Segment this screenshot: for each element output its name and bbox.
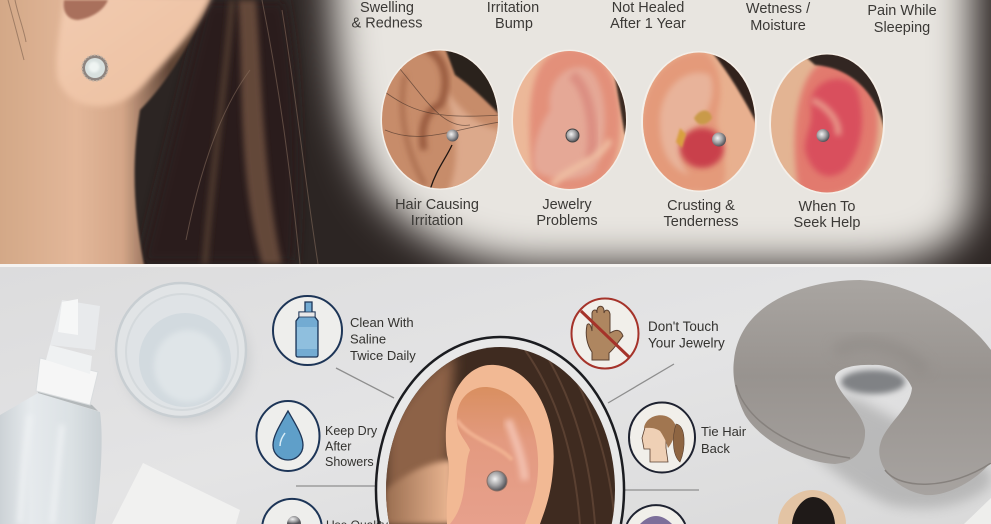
label: clean with saline: Clean With — [350, 315, 414, 330]
icon: quality jewelry — [262, 499, 322, 524]
label: wetness or moisture: Wetness / — [746, 1, 810, 17]
label: crusting and tenderness: Tenderness — [664, 214, 738, 230]
label: keep dry after showers: Showers — [325, 455, 374, 469]
label: swelling and redness: & Redness — [352, 16, 422, 32]
label: jewelry problems: Problems — [536, 213, 598, 229]
photo: hair causing irritation — [380, 48, 500, 192]
icon: saline bottle — [273, 296, 342, 365]
photo: spray bottle — [0, 299, 102, 524]
photo: travel neck pillow — [733, 280, 991, 508]
photo: hair brush — [778, 490, 846, 524]
photo: hair — [140, 0, 318, 264]
label: keep dry after showers: After — [325, 440, 351, 454]
label: pain while sleeping: Sleeping — [874, 20, 930, 36]
label: jewelry problems: Jewelry — [542, 197, 592, 213]
panel: piercing problems — [0, 0, 991, 270]
central ear illustration — [376, 337, 624, 524]
label: hair causing irritation: Irritation — [411, 213, 463, 229]
photo: neck and earlobe — [0, 0, 214, 270]
light vignette centre — [330, 0, 972, 264]
label: clean with saline: Twice Daily — [350, 348, 416, 363]
dark vignette backdrop — [132, 0, 991, 264]
label: not healed after one year: Not Healed — [612, 0, 684, 16]
marble backdrop — [0, 267, 991, 524]
icon: pearl stud earring — [82, 55, 108, 81]
photo: when to seek help — [768, 52, 888, 196]
label: irritation bump: Bump — [495, 16, 533, 32]
label: swelling and redness: Swelling — [360, 0, 414, 16]
icon: do not touch hand — [572, 298, 638, 368]
label: when to seek help: Seek Help — [794, 215, 860, 231]
icon: tied back hair — [629, 402, 695, 472]
label: tie hair back: Tie Hair — [701, 424, 746, 439]
label: clean with saline: Saline — [350, 332, 386, 346]
panel: piercing care — [0, 267, 991, 524]
label: when to seek help: When To — [799, 199, 855, 215]
label: not healed after one year: After 1 Year — [610, 16, 686, 32]
label: keep dry after showers: Keep Dry — [325, 424, 377, 438]
label: irritation bump: Irritation — [487, 0, 539, 16]
icon: clean pillowcase — [627, 505, 685, 524]
label: wetness or moisture: Moisture — [750, 18, 806, 34]
icon: water drop — [256, 401, 320, 471]
photo: jewelry problems — [510, 48, 630, 192]
label: tie hair back: Back — [701, 441, 730, 456]
label: hair causing irritation: Hair Causing — [395, 197, 479, 213]
photo: gauze pad — [112, 463, 240, 524]
corner marble slab — [964, 498, 991, 524]
connector lines — [296, 364, 699, 490]
divider strip — [0, 264, 991, 267]
photo: glass bowl — [116, 283, 250, 422]
label: do not touch your jewelry: Don't Touch — [648, 319, 719, 334]
label: do not touch your jewelry: Your Jewelry — [648, 336, 725, 350]
label: pain while sleeping: Pain While — [867, 3, 937, 19]
label: crusting and tenderness: Crusting & — [667, 198, 735, 214]
photo: crusting and tenderness — [640, 50, 760, 194]
